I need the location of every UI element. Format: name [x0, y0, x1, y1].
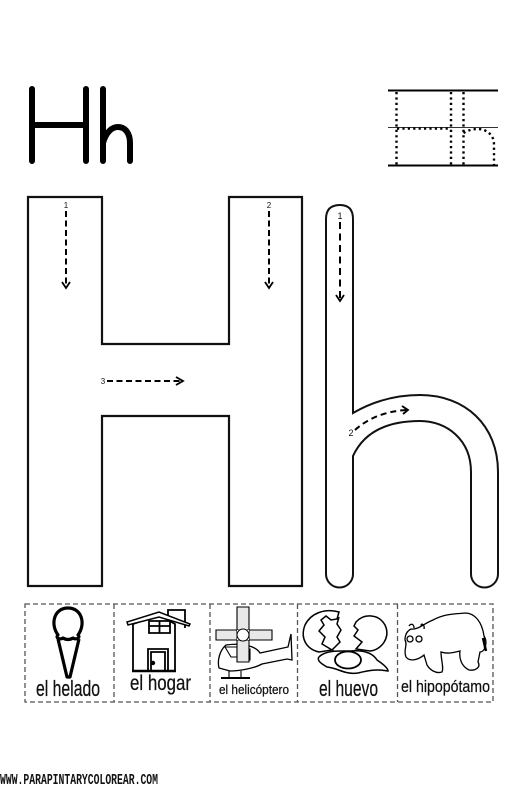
- vocabulary cards strip: [25, 604, 493, 702]
- card: el hipopotamo: el hipopótamo: [401, 678, 490, 696]
- card: el huevo: [303, 611, 388, 701]
- H stroke 1 arrow: 1: [64, 201, 69, 210]
- h stroke 1 arrow: [336, 211, 344, 301]
- H stroke 2 arrow: 2: [267, 201, 272, 210]
- card: el helado: el helado: [36, 676, 100, 701]
- card: el helicoptero: el helicóptero: [219, 682, 289, 697]
- h stroke 2 arrow: [348, 406, 408, 438]
- card: el hipopotamo: [401, 613, 490, 696]
- handwriting practice guide: [388, 90, 498, 166]
- card: el helicoptero: [216, 607, 292, 697]
- large letter H outline: [28, 197, 302, 586]
- card: el helado: [36, 608, 100, 701]
- icon: ice cream cone: [54, 608, 82, 677]
- large letter h outline: [326, 205, 498, 588]
- icon: broken egg: [303, 611, 388, 673]
- h stroke 1 arrow: 1: [337, 211, 343, 221]
- icon: house: [127, 610, 190, 671]
- icon: helicopter: [216, 607, 292, 678]
- card: el hogar: [127, 610, 191, 695]
- card: el huevo: el huevo: [319, 676, 378, 701]
- icon: hippo: [405, 613, 486, 673]
- card: el hogar: el hogar: [130, 672, 191, 695]
- H stroke 3 arrow: 3: [101, 377, 106, 386]
- website footer text: WWW.PARAPINTARYCOLOREAR.COM: [0, 772, 158, 789]
- h stroke 2 arrow: 2: [348, 428, 354, 438]
- H stroke 1 arrow: [62, 201, 70, 288]
- H stroke 2 arrow: [265, 201, 273, 288]
- title: model letters Hh: [32, 89, 130, 161]
- H stroke 3 arrow: [101, 377, 183, 386]
